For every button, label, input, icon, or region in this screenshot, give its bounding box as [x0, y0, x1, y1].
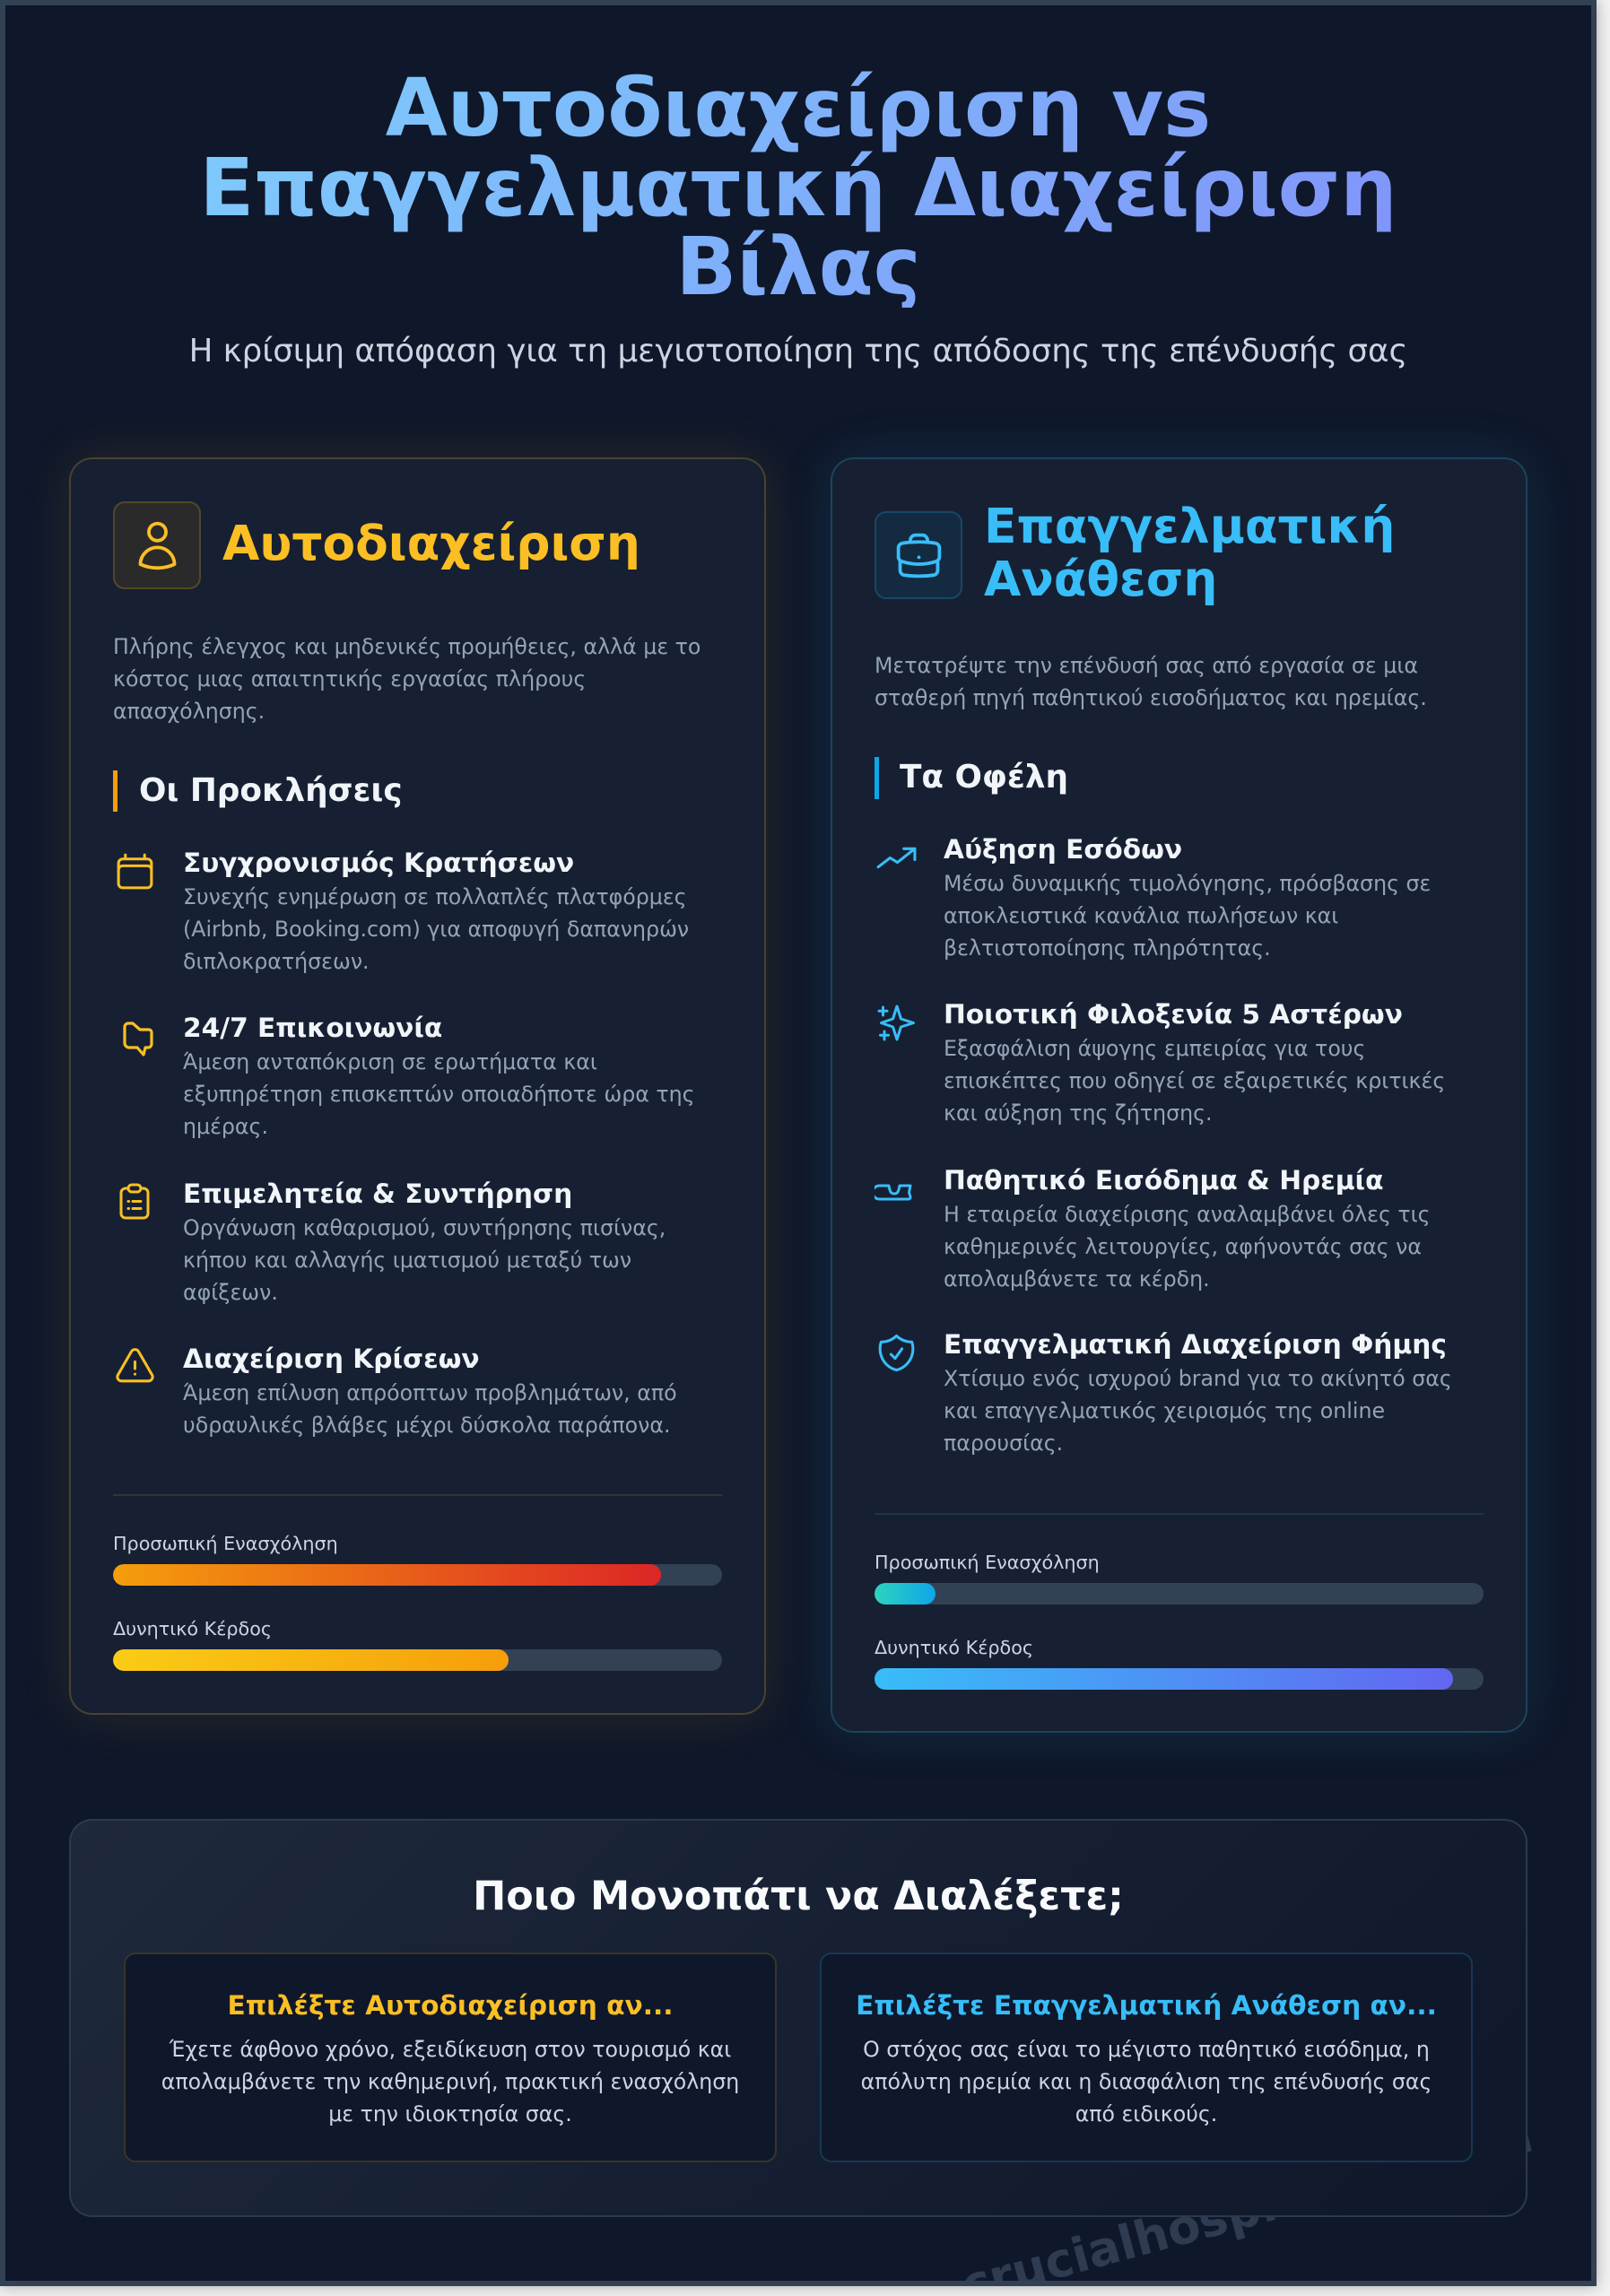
icon: tape: [875, 1184, 912, 1200]
icon: warning: [116, 1348, 154, 1383]
item: passive income: [875, 1164, 1431, 1292]
item: revenue growth: βελτιστοποίησης πληρότητας.: [944, 935, 1271, 961]
description: Πλήρης έλεγχος και μηδενικές προμήθειες, αλλά με το: [113, 634, 701, 659]
description: Μετατρέψτε την επένδυσή σας από εργασία σε μια: [875, 653, 1418, 678]
description: σταθερή πηγή παθητικού εισοδήματος και ηρεμίας.: [875, 685, 1427, 710]
card: choose professional delegation: Επιλέξτε Επαγγελματική Ανάθεση αν...: [856, 1989, 1437, 2021]
item: housekeeping: Επιμελητεία & Συντήρηση: [183, 1178, 572, 1209]
card: choose self-management: Επιλέξτε Αυτοδιαχείριση αν...: [227, 1989, 674, 2021]
title: Βίλας: [675, 221, 921, 314]
item: housekeeping: [120, 1178, 666, 1305]
item: crisis management: [116, 1343, 677, 1438]
heading: benefits: Τα Οφέλη: [900, 759, 1068, 796]
item: crisis management: Άμεση επίλυση απρόοπτων προβλημάτων, από: [183, 1380, 677, 1405]
meter: personal involvement 10%: [875, 1583, 1484, 1605]
card: choose self-management: [124, 1952, 777, 2162]
item: communication: 24/7 Επικοινωνία: [183, 1012, 442, 1043]
icon: sparkles: [877, 1004, 915, 1040]
item: five star hospitality: επισκέπτες που οδηγεί σε εξαιρετικές κριτικές: [944, 1068, 1445, 1093]
item: housekeeping: κήπου και αλλαγής ιματισμού μεταξύ των: [183, 1248, 631, 1273]
panel: self-management: [69, 457, 766, 1715]
icon: clipboard: [120, 1184, 149, 1220]
heading: professional delegation: [984, 498, 1395, 607]
title: [69, 69, 1527, 307]
item: revenue growth: Αύξηση Εσόδων: [944, 833, 1182, 865]
item: passive income: καθημερινές λειτουργίες, αφήνοντάς σας να: [944, 1234, 1422, 1259]
meter label: personal involvement: Προσωπική Ενασχόληση: [875, 1552, 1100, 1573]
heading: challenges: Οι Προκλήσεις: [139, 772, 403, 809]
item: passive income: Παθητικό Εισόδημα & Ηρεμία: [944, 1164, 1383, 1196]
item: communication: ημέρας.: [183, 1114, 268, 1139]
title: Αυτοδιαχείριση vs: [386, 62, 1211, 155]
item: crisis management: Διαχείριση Κρίσεων: [183, 1343, 480, 1374]
card: choose professional delegation: [820, 1952, 1473, 2162]
description: κόστος μιας απαιτητικής εργασίας πλήρους: [113, 666, 586, 691]
card: choose professional delegation: απόλυτη ηρεμία και η διασφάλιση της επένδυσής σας: [861, 2068, 1432, 2093]
item: revenue growth: [877, 833, 1431, 961]
card: choose professional delegation: Ο στόχος σας είναι το μέγιστο παθητικό εισόδημα, η: [863, 2036, 1430, 2061]
item: communication: εξυπηρέτηση επισκεπτών οποιαδήποτε ώρα της: [183, 1082, 695, 1107]
item: passive income: απολαμβάνετε τα κέρδη.: [944, 1266, 1210, 1292]
item: revenue growth: Μέσω δυναμικής τιμολόγησης, πρόσβασης σε: [944, 871, 1431, 896]
item: five star hospitality: [877, 998, 1445, 1126]
item: crisis management: υδραυλικές βλάβες μέχρι δύσκολα παράπονα.: [183, 1413, 671, 1438]
card: choose professional delegation: από ειδικούς.: [1075, 2100, 1217, 2126]
icon: briefcase: [875, 511, 962, 599]
item: passive income: Η εταιρεία διαχείρισης αναλαμβάνει όλες τις: [944, 1202, 1431, 1227]
item: housekeeping: Οργάνωση καθαρισμού, συντήρησης πισίνας,: [183, 1215, 666, 1240]
meter label: potential profit: Δυνητικό Κέρδος: [875, 1636, 1033, 1657]
item: five star hospitality: Εξασφάλιση άψογης εμπειρίας για τους: [944, 1036, 1365, 1061]
item: reputation management: Χτίσιμο ενός ισχυρού brand για το ακίνητό σας: [944, 1366, 1452, 1391]
item: housekeeping: αφίξεων.: [183, 1280, 278, 1305]
meter: personal involvement 90%: [113, 1564, 722, 1586]
meter: potential profit 65%: [113, 1649, 722, 1671]
panel: which path to choose: [69, 1819, 1527, 2217]
item: reputation management: και επαγγελματικός χειρισμός της online: [944, 1398, 1385, 1423]
heading: professional delegation: Επαγγελματική: [984, 498, 1395, 554]
item: reputation management: Επαγγελματική Διαχείριση Φήμης: [944, 1328, 1447, 1360]
item: five star hospitality: Ποιοτική Φιλοξενία 5 Αστέρων: [944, 998, 1403, 1030]
description: απασχόλησης.: [113, 699, 265, 724]
meter label: potential profit: Δυνητικό Κέρδος: [113, 1618, 272, 1639]
description: [875, 653, 1427, 710]
icon: user: [113, 501, 201, 589]
item: revenue growth: αποκλειστικά κανάλια πωλήσεων και: [944, 903, 1338, 928]
card: choose self-management: απολαμβάνετε την καθημερινή, πρακτική ενασχόληση: [161, 2068, 739, 2093]
item: five star hospitality: και αύξηση της ζήτησης.: [944, 1100, 1213, 1126]
card: choose self-management: με την ιδιοκτησία σας.: [328, 2100, 572, 2126]
card: choose self-management: Έχετε άφθονο χρόνο, εξειδίκευση στον τουρισμό και: [170, 2036, 731, 2061]
item: booking sync: (Airbnb, Booking.com) για αποφυγή δαπανηρών: [183, 917, 689, 942]
heading: which path: Ποιο Μονοπάτι να Διαλέξετε;: [473, 1873, 1124, 1919]
subtitle: Η κρίσιμη απόφαση για τη μεγιστοποίηση της απόδοσης της επένδυσής σας: [189, 333, 1407, 370]
meter label: personal involvement: Προσωπική Ενασχόληση: [113, 1532, 338, 1553]
item: booking sync: Συνεχής ενημέρωση σε πολλαπλές πλατφόρμες: [183, 884, 687, 909]
item: reputation management: [879, 1328, 1452, 1456]
panel: professional management: [831, 457, 1527, 1733]
heading: professional delegation: Ανάθεση: [984, 551, 1217, 607]
item: communication: Άμεση ανταπόκριση σε ερωτήματα και: [183, 1049, 597, 1074]
icon: chat bubble: [123, 1022, 153, 1057]
item: reputation management: παρουσίας.: [944, 1431, 1063, 1456]
item: booking sync: [117, 847, 689, 974]
meter: potential profit 95%: [875, 1668, 1484, 1690]
icon: trending up: [877, 847, 917, 868]
title: Επαγγελματική Διαχείριση: [199, 142, 1397, 235]
item: booking sync: Συγχρονισμός Κρατήσεων: [183, 847, 574, 878]
icon: calendar: [117, 854, 152, 890]
description: [113, 634, 701, 724]
heading: self-management: Αυτοδιαχείριση: [222, 515, 640, 571]
item: communication: [123, 1012, 695, 1139]
item: booking sync: διπλοκρατήσεων.: [183, 949, 370, 974]
icon: shield check: [879, 1335, 915, 1372]
